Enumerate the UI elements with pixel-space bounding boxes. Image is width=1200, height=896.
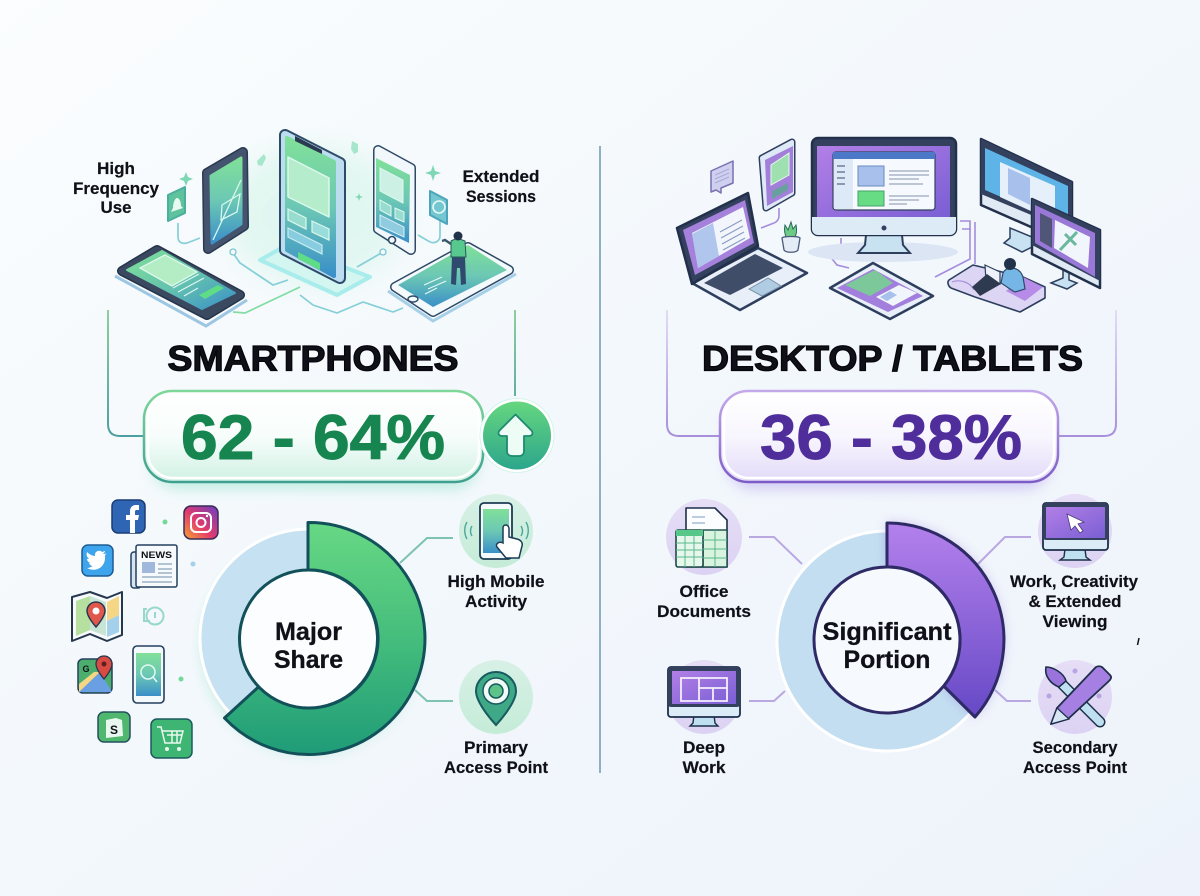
callout: high mobile activity: High Mobile xyxy=(448,573,544,591)
monitor: back right xyxy=(981,139,1072,252)
connector lines xyxy=(749,537,1031,701)
donut label xyxy=(822,618,952,674)
app window xyxy=(833,152,935,210)
icon: google maps xyxy=(78,656,112,693)
monitor: front right xyxy=(1032,199,1100,289)
donut chart: significant portion xyxy=(777,523,1004,751)
callout: primary access point: Primary xyxy=(464,739,529,757)
icon: shopify xyxy=(98,712,130,742)
panel: smartphones xyxy=(72,135,554,777)
donut label: Significant xyxy=(822,618,952,646)
phone: standing left xyxy=(207,152,244,249)
label: high frequency use: Use xyxy=(100,199,132,217)
heading: desktop / tablets: DESKTOP / TABLETS xyxy=(702,340,1083,378)
callout: work, creativity & extended viewing: & Extended xyxy=(1028,593,1122,611)
callout: deep work: Deep xyxy=(683,739,725,757)
app icons cluster xyxy=(72,500,218,758)
icon: news: NEWS xyxy=(141,550,172,561)
callout: work, creativity & extended viewing: Viewing xyxy=(1042,613,1108,631)
connector lines xyxy=(400,538,453,701)
phone: large center xyxy=(285,135,340,278)
label: extended sessions: Extended xyxy=(462,168,540,186)
icon: chat bubble xyxy=(711,161,733,193)
donut label xyxy=(274,618,343,674)
laptop xyxy=(677,193,807,310)
callout: deep work: Work xyxy=(682,759,726,777)
glowing platform xyxy=(260,245,370,295)
icon: instagram xyxy=(184,506,218,539)
tablet: upright with calendar xyxy=(762,142,793,208)
callout: office documents xyxy=(657,499,751,621)
person figure xyxy=(442,232,466,285)
icon: folded map xyxy=(72,592,122,641)
donut chart: major share xyxy=(200,522,425,756)
icon: shopify: S xyxy=(110,723,118,737)
bracket lines xyxy=(667,310,1116,436)
label: high frequency use: High xyxy=(97,160,135,178)
donut segment: green xyxy=(224,522,425,754)
label: extended sessions: Sessions xyxy=(466,188,536,206)
callout: work, creativity & extended viewing: Work, Creativity xyxy=(1010,573,1139,591)
phone: lying left xyxy=(115,250,247,326)
callout: office documents: Office xyxy=(680,583,728,601)
phone: white right xyxy=(376,150,411,250)
monitor: large center xyxy=(812,138,956,253)
callout: high mobile activity xyxy=(448,494,544,611)
icon: news xyxy=(131,545,177,588)
label: high frequency use: Frequency xyxy=(73,180,160,198)
phone: lying right with person xyxy=(388,232,516,321)
donut label: Major xyxy=(275,618,342,646)
center divider xyxy=(599,146,601,773)
donut label: Portion xyxy=(844,646,930,674)
stat pill: 62 - 64% xyxy=(144,391,483,490)
label: high frequency use xyxy=(73,160,160,217)
panel: desktop / tablets xyxy=(657,138,1139,777)
callout: work, creativity & extended viewing xyxy=(1010,494,1139,645)
icon: twitter xyxy=(82,545,113,576)
person on bed xyxy=(948,258,1045,312)
illustration: connected phones xyxy=(115,135,516,326)
illustration: desktop devices xyxy=(677,138,1100,319)
stat pill: 36 - 38%: 36 - 38% xyxy=(760,403,1022,473)
icon: up arrow badge xyxy=(480,398,554,472)
callout: office documents: Documents xyxy=(657,603,751,621)
tablet: flat xyxy=(830,263,933,319)
donut segment: purple xyxy=(887,523,1004,717)
callout: primary access point xyxy=(444,660,549,777)
callout: secondary access point: Access Point xyxy=(1023,759,1128,777)
icon: plant xyxy=(782,222,800,252)
callout: deep work xyxy=(667,660,741,777)
stat pill: 62 - 64%: 62 - 64% xyxy=(181,403,445,473)
callout: secondary access point xyxy=(1023,660,1128,777)
icon: bell tag xyxy=(168,187,185,221)
stat pill: 36 - 38% xyxy=(720,391,1058,490)
donut label: Share xyxy=(274,646,343,674)
heading: smartphones: SMARTPHONES xyxy=(168,340,458,378)
callout: high mobile activity: Activity xyxy=(465,593,528,611)
callout: secondary access point: Secondary xyxy=(1032,739,1118,757)
label: extended sessions xyxy=(462,168,540,206)
callout: primary access point: Access Point xyxy=(444,759,549,777)
bracket lines xyxy=(108,310,515,436)
icon: search phone xyxy=(133,646,164,703)
icon: clock tag xyxy=(430,191,447,224)
icon: facebook xyxy=(112,500,145,533)
icon: info bubble xyxy=(144,608,164,624)
icon: google maps: G xyxy=(82,664,90,674)
icon: cart xyxy=(151,719,192,758)
